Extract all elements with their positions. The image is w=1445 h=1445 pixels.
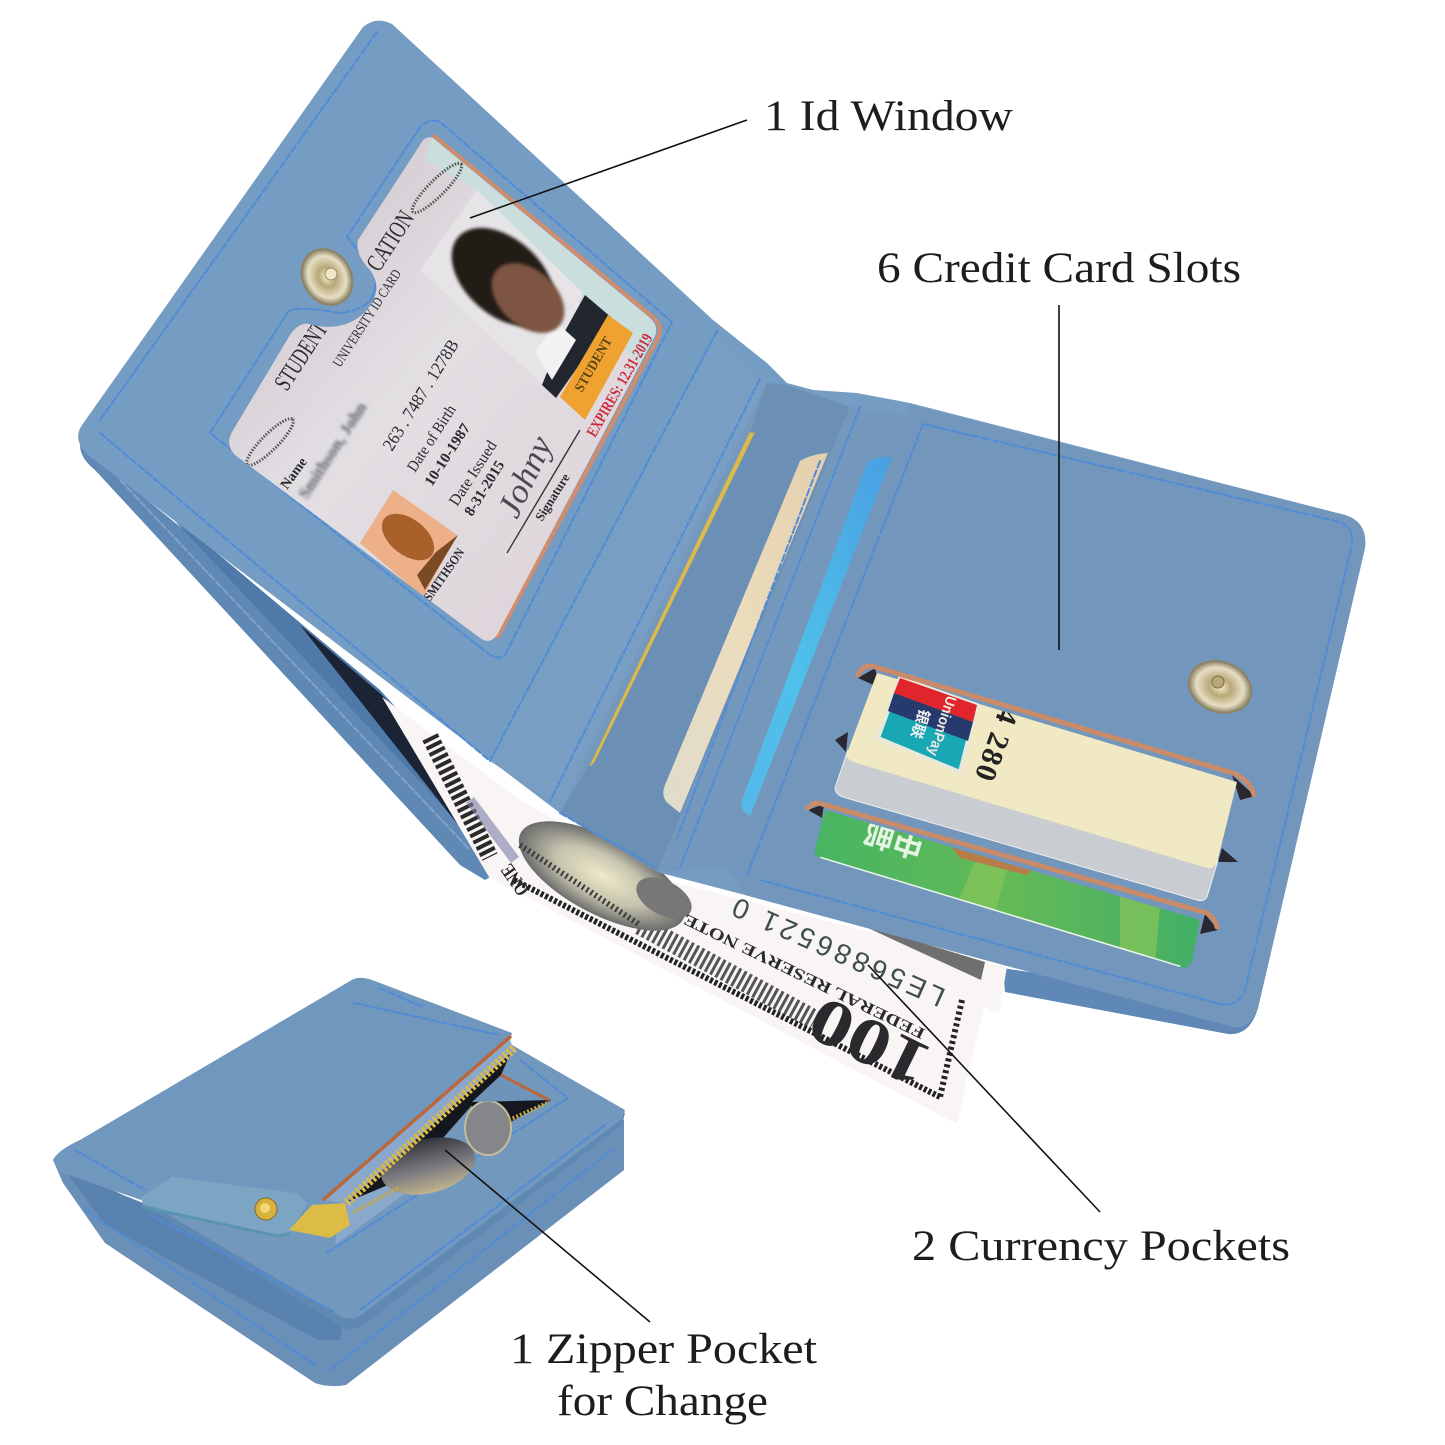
label: zipper pocket: 1 Zipper Pocket: [510, 1326, 817, 1373]
stitching on small wallet: [75, 988, 612, 1370]
green card: [814, 810, 1200, 968]
label: zipper pocket: [510, 1326, 817, 1425]
card text: [269, 206, 656, 604]
bill corner value: ONE: [497, 859, 534, 900]
grey card: [835, 750, 1218, 901]
top face: [53, 978, 512, 1205]
teal corner: [425, 135, 660, 365]
small closed wallet: [53, 978, 625, 1386]
middle pocket: [560, 383, 850, 872]
portrait: [449, 225, 612, 398]
cream card: [663, 453, 828, 813]
open wallet: [78, 21, 1365, 1124]
card text: Smithson, John: [294, 398, 371, 502]
portrait on bill: [503, 799, 701, 953]
wallet lower layer: [53, 1110, 624, 1386]
card text: Signature: [532, 471, 573, 524]
stitching: [100, 32, 1352, 1005]
card text: 10-10-1987: [422, 421, 474, 489]
zipper pull tab: [141, 1177, 308, 1236]
callout line: zipper pocket: [445, 1150, 650, 1322]
credit card slots: [800, 666, 1255, 980]
slot three edge: [808, 803, 1217, 927]
label: currency pockets: 2 Currency Pockets: [912, 1223, 1290, 1270]
zipper fabric: [323, 1040, 514, 1203]
unionpay logo: [878, 678, 977, 772]
photo background: [420, 190, 583, 387]
card text: 263 . 7487 . 1278B: [378, 336, 463, 454]
id window with student card: [229, 134, 662, 641]
cream card: [847, 673, 1237, 868]
callout line: id window: [470, 120, 747, 218]
card number: 84 280: [968, 688, 1030, 785]
zipper slider: [289, 1203, 350, 1238]
yellow card edge: [590, 433, 754, 766]
right snap button: [1181, 653, 1259, 721]
bill denomination: 100: [797, 982, 942, 1102]
federal reserve note text: FEDERAL RESERVE NOTE: [681, 910, 928, 1042]
pocket strip with slot: [657, 407, 910, 872]
zipper teeth: [346, 1048, 514, 1203]
card chip: [952, 847, 1033, 875]
label: id window: 1 Id Window: [764, 93, 1013, 140]
pocket panel left of yellow card: [560, 383, 767, 813]
card text: Date Issued: [446, 438, 501, 509]
label: credit card slots: 6 Credit Card Slots: [877, 245, 1241, 292]
card text: SMITHSON: [420, 545, 468, 604]
orange student badge: [560, 315, 633, 420]
signature line: [507, 430, 580, 553]
coins: [375, 1101, 511, 1204]
unionpay logo: UnionPay: [924, 694, 959, 759]
card brand characters: 中邮: [861, 814, 928, 863]
card text: STUDENT: [572, 334, 616, 395]
serial number: LE56886521 0: [728, 891, 949, 1013]
slot one edge: [858, 666, 1254, 795]
small portrait: [360, 490, 458, 597]
bottom layer edge: [1003, 968, 1258, 1034]
slot openings: [808, 668, 1255, 934]
hundred dollar bills: [382, 697, 1007, 1124]
card text: 8-31-2015: [462, 458, 508, 519]
interior fold: [66, 1172, 342, 1340]
callout line: currency pockets: [868, 965, 1100, 1212]
card text: Name: [278, 455, 311, 492]
label: zipper pocket: for Change: [557, 1378, 768, 1425]
card text: Johny: [491, 430, 561, 523]
card text: Date of Birth: [404, 402, 460, 475]
callout line: credit card slots: [1058, 305, 1060, 650]
zipper edge trim: [323, 1036, 511, 1200]
zipper opening: [323, 1036, 551, 1245]
fold strip: [490, 331, 767, 809]
blue card: [741, 457, 892, 816]
front flap: [143, 1050, 625, 1329]
card text: CATION: [361, 206, 420, 276]
right panel: [727, 405, 1365, 1027]
inner body of wallet: [78, 21, 1365, 1027]
card text: EXPIRES: 12.31-2019: [584, 331, 656, 440]
inner pocket fabric: [472, 1075, 551, 1102]
back cover of wallet: [80, 445, 520, 880]
card text: UNIVERSITY ID CARD: [331, 267, 405, 370]
card text: STUDENT: [269, 317, 333, 395]
ornaments: [242, 158, 467, 470]
unionpay logo: 银联: [906, 706, 935, 741]
left snap button: [292, 240, 362, 314]
